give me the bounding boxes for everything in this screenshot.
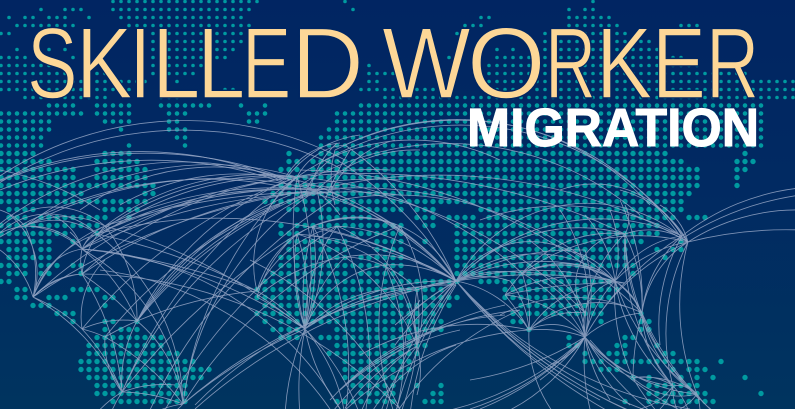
title: SKILLED WORKER: K xyxy=(76,8,133,120)
title: SKILLED WORKER: E xyxy=(652,8,706,120)
title: SKILLED WORKER: E xyxy=(242,8,291,120)
title: SKILLED WORKER: O xyxy=(467,8,546,120)
title: SKILLED WORKER: W xyxy=(382,8,471,120)
title: SKILLED WORKER xyxy=(27,8,759,120)
title: SKILLED WORKER: K xyxy=(596,8,653,120)
title: SKILLED WORKER: R xyxy=(706,8,759,120)
title: SKILLED WORKER: L xyxy=(152,8,200,120)
title: SKILLED WORKER: I xyxy=(129,8,151,120)
title: SKILLED WORKER: S xyxy=(27,8,78,120)
title: SKILLED WORKER: D xyxy=(291,8,364,120)
title: SKILLED WORKER: R xyxy=(545,8,596,120)
title: SKILLED WORKER: L xyxy=(197,8,245,120)
